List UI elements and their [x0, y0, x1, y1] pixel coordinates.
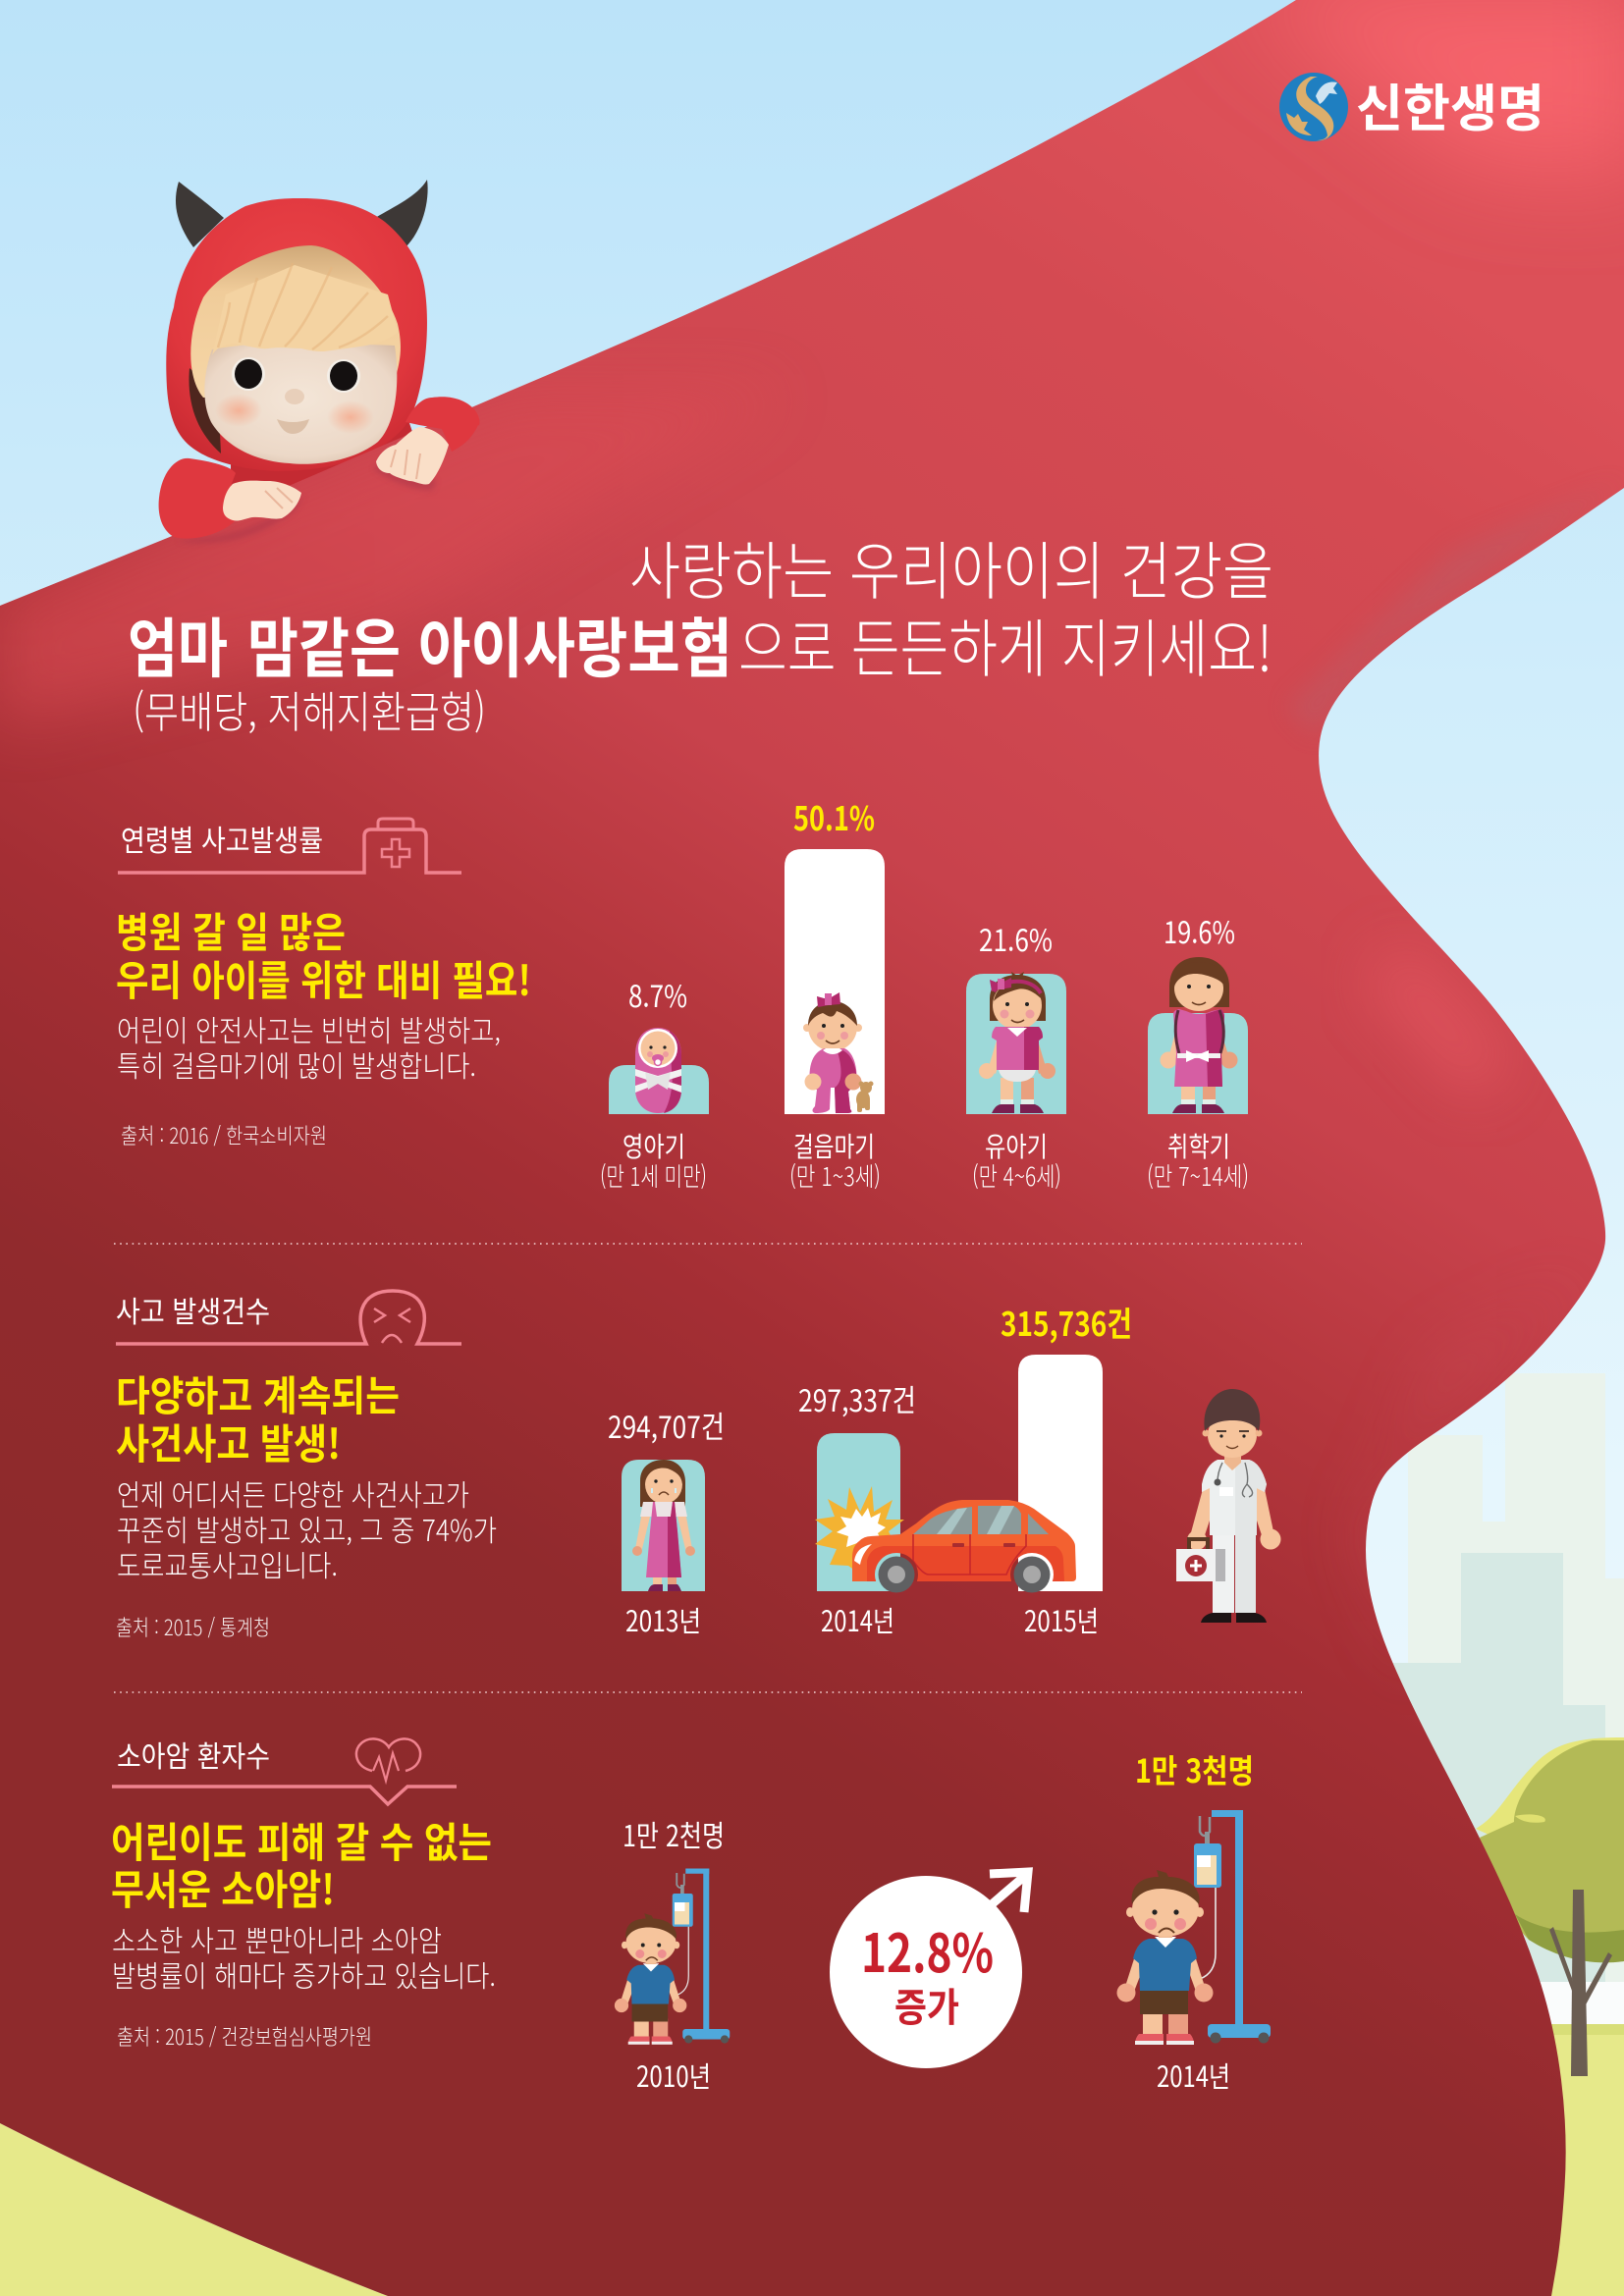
- body text: [112, 1917, 496, 1996]
- bar: 2013: [622, 1460, 705, 1591]
- axis labels: 영아기: [623, 1126, 685, 1165]
- title: 맘같은: [247, 597, 401, 691]
- values: 21.6%: [979, 916, 1053, 960]
- section heading with sad face icon: [116, 1288, 461, 1344]
- bar: school age: [1148, 1013, 1248, 1114]
- section heading with first-aid kit icon: 연령별 사고발생률: [121, 817, 323, 860]
- icon: nurse with first-aid kit: [1176, 1389, 1280, 1623]
- panel: accident rate by age: [116, 792, 1249, 1194]
- headline: 어린이도 피해 갈 수 없는: [111, 1810, 492, 1870]
- panel: pediatric cancer patients: [111, 1733, 1271, 2096]
- headline: 무서운 소아암!: [111, 1857, 335, 1917]
- label: 2014: 2014년: [1157, 2055, 1230, 2096]
- axis labels: 2015년: [1024, 1599, 1099, 1640]
- icon: boy with IV stand 2010: [615, 1869, 730, 2045]
- icon: boy with IV stand 2014: [1117, 1810, 1271, 2045]
- title: [128, 522, 1273, 740]
- section heading with heart-pulse icon: [112, 1733, 457, 1804]
- callout: 12.8% increase: [830, 1872, 1028, 2068]
- panel: number of accidents: [116, 1288, 1280, 1642]
- bar chart: accident counts: [608, 1298, 1280, 1640]
- bar: infant: [609, 1065, 709, 1114]
- values: 50.1%: [793, 792, 875, 840]
- background: city buildings: [1276, 1373, 1624, 2025]
- body text: [117, 1471, 497, 1585]
- values: 8.7%: [628, 972, 687, 1016]
- logo: Shinhan Life: 신한생명: [1356, 68, 1544, 141]
- title: 으로 든든하게 지키세요!: [738, 600, 1272, 690]
- bar: 2015: [1018, 1355, 1103, 1591]
- illustration: kid's sleeves and hands on the wall: [159, 397, 479, 543]
- value: 2014 patients: 1만 3천명: [1135, 1745, 1254, 1792]
- bar chart: age groups: [600, 792, 1249, 1194]
- icon: schoolgirl with backpack: [1161, 957, 1237, 1113]
- axis labels: [600, 1126, 1249, 1194]
- body text: 언제 어디서든 다양한 사건사고가: [117, 1471, 469, 1515]
- icon: crash explosion: [815, 1486, 904, 1575]
- headline: [111, 1810, 492, 1917]
- section heading with first-aid kit icon: [118, 817, 461, 873]
- values: 315,736건: [1001, 1298, 1132, 1346]
- axis labels: 2014년: [821, 1599, 894, 1640]
- axis labels: 취학기: [1167, 1126, 1230, 1165]
- headline: [116, 900, 531, 1008]
- title: 사랑하는 우리아이의 건강을: [629, 522, 1273, 613]
- headline: 사건사고 발생!: [116, 1412, 341, 1471]
- axis labels: (만 4~6세): [972, 1157, 1061, 1194]
- headline: 우리 아이를 위한 대비 필요!: [116, 948, 531, 1008]
- bar: toddler: [785, 849, 885, 1114]
- body text: 어린이 안전사고는 빈번히 발생하고,: [117, 1007, 501, 1050]
- values: 294,707건: [608, 1403, 725, 1447]
- values: 297,337건: [798, 1376, 916, 1420]
- icon: swaddled baby: [635, 1028, 681, 1113]
- axis labels: 걸음마기: [793, 1126, 875, 1165]
- bar: 2014: [817, 1433, 900, 1591]
- axis labels: (만 1세 미만): [600, 1157, 707, 1194]
- title: 엄마: [128, 597, 228, 691]
- body text: 발병률이 해마다 증가하고 있습니다.: [112, 1952, 496, 1996]
- values: 19.6%: [1164, 908, 1235, 952]
- label: 2010: 2010년: [636, 2055, 711, 2096]
- axis labels: (만 7~14세): [1147, 1157, 1249, 1194]
- body text: 도로교통사고입니다.: [117, 1542, 338, 1585]
- body text: [117, 1007, 501, 1086]
- body text: 꾸준히 발생하고 있고, 그 중 74%가: [117, 1507, 497, 1550]
- callout: 12.8% increase: 증가: [894, 1976, 959, 2033]
- headline: [116, 1363, 400, 1471]
- axis labels: 2013년: [625, 1599, 701, 1640]
- source: 출처 : 2015 / 건강보험심사평가원: [117, 2020, 372, 2052]
- icon: girl in diaper: [979, 972, 1056, 1113]
- section heading with heart-pulse icon: 소아암 환자수: [117, 1733, 270, 1776]
- bar: preschooler: [966, 974, 1066, 1114]
- callout: 12.8% increase: 12.8%: [861, 1910, 994, 1988]
- source: 출처 : 2016 / 한국소비자원: [121, 1119, 327, 1150]
- axis labels: (만 1~3세): [789, 1157, 881, 1194]
- value: 2010 patients: 1만 2천명: [623, 1812, 725, 1855]
- icon: toddler with teddy: [803, 992, 874, 1113]
- icon: crying girl: [632, 1460, 695, 1591]
- section heading with sad face icon: 사고 발생건수: [116, 1288, 270, 1331]
- title: (무배당, 저해지환급형): [133, 677, 486, 740]
- headline: 다양하고 계속되는: [116, 1363, 400, 1423]
- illustration: hooded kid: [166, 180, 428, 510]
- icon: red car: [852, 1500, 1076, 1596]
- illustration: tree: [1476, 1737, 1624, 2076]
- source: 출처 : 2015 / 통계청: [116, 1611, 270, 1642]
- axis labels: 유아기: [985, 1126, 1048, 1165]
- title: 아이사랑보험: [418, 597, 732, 691]
- axis labels: [625, 1599, 1099, 1640]
- body text: 특히 걸음마기에 많이 발생합니다.: [117, 1042, 476, 1086]
- values: [628, 792, 1235, 1016]
- headline: 병원 갈 일 많은: [116, 900, 346, 960]
- values: [608, 1298, 1132, 1447]
- body text: 소소한 사고 뿐만아니라 소아암: [112, 1917, 442, 1960]
- background: ground: [0, 2024, 1624, 2296]
